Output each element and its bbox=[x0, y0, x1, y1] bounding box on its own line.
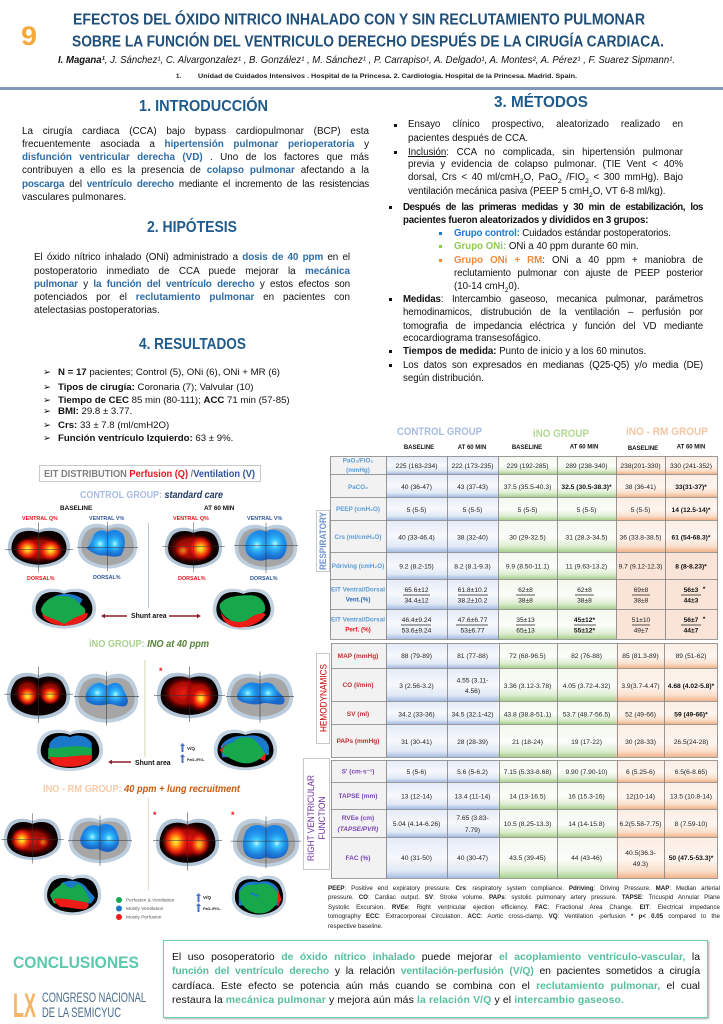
legend bbox=[116, 897, 175, 920]
text: metodos: ecocardiograma transesofágico. bbox=[403, 333, 541, 344]
row: RVEe bbox=[331, 809, 717, 837]
text: resultados list: Función ventrículo Izquierdo: 63 ± 9%. bbox=[58, 433, 233, 444]
text: hipotesis: postoperatorio inmediato de CCA puede mejorar la mecánica bbox=[34, 266, 350, 277]
iNO baseline merged map bbox=[37, 730, 103, 771]
column labels: control group: DORSAL% bbox=[250, 576, 278, 582]
text: resultados list: Crs: 33 ± 7.8 (ml/cmH2O) bbox=[58, 420, 169, 431]
text: resultados list: N = 17 pacientes; Control (5), ONi (6), ONi + MR (6) bbox=[58, 367, 280, 378]
RM baseline ventilation map bbox=[68, 816, 132, 866]
row: RVEe: 10.5 (8.25-13.3) bbox=[504, 821, 551, 828]
row: PAPs: 30 (28-33) bbox=[625, 739, 656, 746]
RM baseline perfusion map bbox=[1, 813, 64, 864]
heading: metodos: 3. MÉTODOS bbox=[494, 94, 588, 111]
row: TAPSE: 12(10-14) bbox=[626, 794, 655, 800]
iNO 60 min perfusion map bbox=[154, 667, 225, 722]
logo: LX congreso nacional: LX bbox=[13, 987, 36, 1024]
logo: LX congreso nacional bbox=[13, 987, 146, 1024]
row: PaO2/FiO2: (mmHg) bbox=[346, 467, 370, 474]
text: hipotesis: potenciados por el reclutamiento pulmonar en pacientes con bbox=[34, 292, 350, 303]
column labels: control group bbox=[22, 505, 282, 582]
authors: I. Magana¹, J. Sánchez¹, C. Alvargonzalez¹ , B. González¹ , M. Sánchez¹ , P. Carrapiso¹, A. Delgado¹, A. Montes², A. Pérez¹ , F. Suarez Sipmann¹. bbox=[58, 55, 675, 66]
legend: Mostly Perfusion bbox=[126, 914, 162, 920]
text: hipotesis bbox=[34, 252, 350, 316]
row: PEEP: 5 (5-5) bbox=[631, 507, 650, 514]
row: PaO2/FiO2 bbox=[330, 456, 717, 474]
row: S' bbox=[331, 760, 717, 782]
row: TAPSE: 14 (13-16.5) bbox=[509, 794, 546, 800]
up arrows V/Q PaO2: RM: PaO₂/FIO₂ bbox=[203, 907, 221, 911]
iNO baseline ventilation map bbox=[74, 672, 139, 726]
row: PAPs: 21 (18-24) bbox=[512, 739, 543, 746]
text: introduccion: disfunción ventricular derecha (VD) . Uno de los factores que más bbox=[22, 152, 369, 163]
row: EIT perfusion: 65±13 bbox=[516, 628, 535, 634]
panel: conclusiones text box bbox=[163, 940, 708, 1018]
row: FAC: FAC (%) bbox=[346, 855, 370, 862]
column labels: control group: VENTRAL V% bbox=[247, 516, 282, 522]
column headers: AT 60 MIN bbox=[570, 444, 598, 450]
column labels: control group: DORSAL% bbox=[93, 575, 121, 581]
row: EIT perfusion: Perf. (%) bbox=[345, 626, 371, 634]
text: metodos: Grupo ONi + RM: ONi a 40 ppm + maniobra de bbox=[454, 255, 703, 266]
row: PaCO2: 38 (36-41) bbox=[625, 484, 656, 491]
significance stars: * bbox=[231, 810, 235, 820]
text: resultados list: ➢ bbox=[43, 406, 51, 417]
column labels: control group: VENTRAL Q% bbox=[22, 516, 58, 522]
row: Crs: 40 (33-46.4) bbox=[398, 534, 435, 542]
control baseline ventilation map bbox=[77, 522, 138, 571]
text: metodos: Después de las primeras medidas y 30 min de estabilización, los bbox=[403, 202, 703, 213]
panel: results table bbox=[303, 426, 718, 879]
row: FAC: 43.5 (39-45) bbox=[509, 855, 546, 862]
row: EIT perfusion: 47.6±6.77 bbox=[458, 617, 488, 624]
legend: Mostly Ventilation bbox=[126, 906, 164, 912]
text: metodos: tomografia de impedancia eléctrica y función del VD mediante bbox=[403, 321, 703, 332]
row: EIT ventilation: 62±8 bbox=[518, 587, 533, 594]
text: hipotesis: pulmonar y la función del ventrículo derecho y estos efectos son bbox=[34, 279, 350, 290]
significance star: * bbox=[159, 666, 163, 676]
text: metodos: Los datos son expresados en medianas (Q25-Q5) y/o media (DE) bbox=[403, 360, 703, 371]
row: MAP: MAP (mmHg) bbox=[338, 653, 378, 660]
row: PEEP: PEEP (cmH₂O) bbox=[336, 506, 380, 513]
row: MAP: 81 (77-88) bbox=[457, 653, 488, 660]
row: FAC: 40 (30-47) bbox=[457, 855, 488, 862]
row: EIT ventilation: 62±8 bbox=[577, 587, 592, 594]
row: PaCO2 bbox=[330, 474, 717, 497]
heading: conclusiones: CONCLUSIONES bbox=[13, 954, 139, 972]
row: Crs: 38 (32-40) bbox=[457, 534, 488, 542]
row: MAP: 89 (51-62) bbox=[676, 653, 706, 660]
control baseline perfusion map bbox=[5, 522, 73, 572]
row: EIT ventilation: 38±8 bbox=[518, 598, 533, 604]
row: S': 6.5(6-8.65) bbox=[675, 769, 707, 776]
row: SV: 43.8 (38.8-51.1) bbox=[504, 712, 551, 718]
section: hemodynamics rows bbox=[331, 643, 717, 757]
up arrows V/Q PaO2: iNO: PaO₂/FIO₂ bbox=[187, 758, 205, 762]
row: S': 5 (5-6) bbox=[407, 769, 426, 776]
shunt area label: control bbox=[101, 613, 201, 620]
text: metodos: Ensayo clínico prospectivo, aleatorizado realizado en bbox=[408, 119, 683, 130]
row: EIT ventilation bbox=[330, 579, 717, 609]
section label: respiratory: RESPIRATORY bbox=[318, 512, 328, 570]
row: CO: 4.56) bbox=[465, 688, 480, 695]
grid: hemodynamics bbox=[332, 644, 718, 758]
row: EIT ventilation: 61.8±10.2 bbox=[458, 587, 488, 594]
row: SV: 34.2 (33-36) bbox=[398, 712, 435, 718]
row: Pdriving: 9.2 (8.2-15) bbox=[399, 564, 434, 570]
row: SV: SV (ml) bbox=[347, 711, 369, 718]
text: resultados list: ➢ bbox=[43, 367, 51, 378]
row: PaCO2: 37.5 (35.5-40.3) bbox=[504, 484, 551, 491]
footnote: abbreviations: PEEP: Positive end expiratory pressure. Crs: respiratory system compliance. Pdriving: Driving Pressure. MAP: Median arterial bbox=[328, 885, 720, 892]
row: EIT perfusion: EIT Ventral/Dorsal bbox=[331, 616, 385, 624]
row: MAP bbox=[331, 643, 717, 668]
row: CO: 3.9(3.7-4.47) bbox=[621, 683, 660, 690]
up arrows V/Q PaO2: iNO bbox=[180, 743, 205, 763]
text: metodos: Tiempos de medida: Punto de inicio y a los 60 minutos. bbox=[403, 346, 646, 357]
row: PAPs: 28 (28-39) bbox=[457, 739, 488, 746]
row: EIT perfusion: 46.4±9.24 bbox=[402, 617, 432, 624]
section label: right ventricular function: RIGHT VENTRICULAR bbox=[306, 775, 316, 861]
row: PaCO2: 32.5 (30.5-38.3)* bbox=[561, 484, 612, 491]
text: resultados list: ➢ bbox=[43, 420, 51, 431]
significance stars: * bbox=[153, 810, 157, 820]
grid: respiratory bbox=[330, 456, 718, 640]
poster number: 9 bbox=[21, 21, 37, 51]
text: metodos: pacientes fueron aleatorizados y divididos en 3 grupos: bbox=[403, 215, 648, 226]
row: PaO2/FiO2: 225 (163-234) bbox=[395, 463, 438, 470]
section label: hemodynamics: HEMODYNAMICS bbox=[318, 664, 328, 732]
text: metodos bbox=[389, 119, 703, 384]
iNO-RM group title: INO - RM GROUP: 40 ppm + lung recruitment bbox=[43, 784, 241, 795]
section: respiratory rows bbox=[330, 456, 717, 639]
row: CO: CO (l/min) bbox=[342, 682, 374, 689]
row: PaO2/FiO2: 330 (241-352) bbox=[670, 463, 712, 470]
column headers: BASELINE bbox=[404, 445, 434, 451]
RM baseline merged map bbox=[44, 875, 101, 915]
panel: conclusiones text box: cardíaca. Este efecto se potencia aún más cuando se combina con el reclutamiento pulmonar, el cual bbox=[172, 981, 700, 992]
row: S': 6 (5.25-6) bbox=[626, 769, 655, 776]
row: Pdriving: 8 (8-8.23)* bbox=[675, 564, 707, 570]
footnote: abbreviations: tomography ECC: Extracorporeal Circulation. ACC: Aortic cross-clamp. VQ: Ventilation -perfusion * p< 0.05 compared to the bbox=[328, 913, 720, 920]
text: resultados list: Tipos de cirugía: Coronaria (7); Valvular (10) bbox=[58, 382, 253, 393]
iNO 60 min merged map bbox=[214, 730, 277, 770]
row: CO: 3.36 (3.12-3.78) bbox=[504, 683, 551, 690]
affiliations: 1. bbox=[176, 73, 181, 80]
row: RVEe: 5.04 (4.14-6.26) bbox=[393, 821, 440, 828]
row: RVEe: 6.2(5.58-7.75) bbox=[619, 821, 662, 828]
text: resultados list: Tiempo de CEC 85 min (80-111); ACC 71 min (57-85) bbox=[58, 395, 290, 406]
row: Pdriving: Pdriving (cmH₂O) bbox=[332, 563, 384, 570]
row: PAPs: 19 (17-22) bbox=[571, 739, 602, 746]
control baseline merged map bbox=[32, 589, 96, 629]
row: RVEe: 14 (14-15.8) bbox=[568, 821, 605, 828]
row: PEEP bbox=[330, 497, 717, 520]
row: RVEe: (TAPSE/PVR) bbox=[338, 826, 378, 833]
RM 60 min ventilation map bbox=[231, 817, 301, 868]
row: CO bbox=[331, 668, 717, 701]
text: metodos: hemodinamicos, distrubución de la ventilación – perfusión por bbox=[403, 307, 703, 318]
row: CO: 4.68 (4.02-5.8)* bbox=[668, 683, 715, 690]
row: FAC: 50 (47.5-53.3)* bbox=[669, 855, 714, 862]
row: EIT perfusion: * bbox=[703, 616, 706, 623]
text: metodos: Medidas: Intercambio gaseoso, mecanica pulmonar, parámetros bbox=[403, 294, 703, 305]
heading: hipotesis: 2. HIPÓTESIS bbox=[147, 218, 237, 236]
row: PaCO2: 40 (36-47) bbox=[401, 484, 432, 491]
row: MAP: 82 (76-88) bbox=[571, 653, 602, 660]
title bbox=[72, 10, 664, 50]
column headers bbox=[404, 444, 705, 452]
grid: right ventricular bbox=[332, 760, 718, 878]
row: Crs bbox=[330, 520, 717, 552]
RM 60 min perfusion map bbox=[153, 812, 222, 870]
row: PaO2/FiO2: 222 (173-235) bbox=[451, 463, 494, 470]
row: EIT ventilation: EIT Ventral/Dorsal bbox=[331, 586, 385, 594]
logo: LX congreso nacional: DE LA SEMICYUC bbox=[42, 1004, 121, 1020]
header bbox=[0, 10, 723, 90]
panel: conclusiones text box: El uso posoperatorio de óxido nítrico inhalado puede mejorar el acoplamiento ventrículo-vascular, la bbox=[172, 952, 700, 963]
panel: conclusiones text box: restaura la mecánica pulmonar y mejora aún más la relación V/Q y el intercambio gaseoso. bbox=[172, 995, 624, 1006]
column headers: BASELINE bbox=[628, 446, 658, 452]
row: EIT perfusion: 55±12* bbox=[574, 628, 595, 634]
row: PaCO2: 43 (37-43) bbox=[457, 484, 488, 491]
row: SV: 59 (49-66)* bbox=[674, 712, 708, 718]
text: metodos: previa y evidencia de colapso pulmonar. (TIE Vent < 40% bbox=[408, 159, 683, 170]
row: EIT ventilation: 34.4±12 bbox=[404, 598, 429, 604]
row: PaO2/FiO2: 229 (192-285) bbox=[506, 463, 549, 470]
row: PEEP: 5 (5-5) bbox=[463, 507, 482, 514]
row: PaO2/FiO2: 289 (238-340) bbox=[565, 463, 608, 470]
column labels: control group: VENTRAL V% bbox=[89, 516, 124, 522]
text: hipotesis: El óxido nítrico inhalado (ONi) administrado a dosis de 40 ppm en el bbox=[34, 252, 350, 263]
text: introduccion: frecuentemente asociada a hipertensión pulmonar perioperatoria y bbox=[22, 139, 369, 150]
shunt area label: control: Shunt area bbox=[131, 613, 167, 620]
control 60 min merged map bbox=[213, 589, 274, 630]
row: TAPSE: 13 (12-14) bbox=[401, 794, 432, 800]
row: MAP: 88 (79-89) bbox=[401, 653, 432, 660]
EIT heading box bbox=[40, 466, 260, 482]
row: FAC bbox=[331, 837, 717, 878]
row: PAPs bbox=[331, 724, 717, 757]
row: EIT perfusion: 51±10 bbox=[632, 617, 651, 624]
row: PAPs: PAPs (mmHg) bbox=[337, 738, 379, 745]
iNO group title: iNO GROUP: INO at 40 ppm bbox=[89, 639, 209, 650]
section label: right ventricular function: FUNCTION bbox=[317, 796, 327, 840]
row: Crs: 36 (33.8-38.5) bbox=[619, 534, 662, 542]
text: metodos: reclutamiento pulmonar con ajuste de PEEP posterior bbox=[454, 268, 703, 279]
row: Pdriving: 9.9 (8.50-11.1) bbox=[506, 564, 549, 570]
row: PAPs: 31 (30-41) bbox=[401, 739, 432, 746]
shunt area label: iNO: Shunt area bbox=[135, 760, 171, 767]
text: introduccion: vasculares pulmonares. bbox=[22, 192, 126, 203]
up arrows V/Q PaO2: iNO: V/Q bbox=[187, 746, 195, 751]
row: PaCO2: 33(31-37)* bbox=[675, 484, 707, 491]
control group title: CONTROL GROUP: standard care bbox=[80, 490, 223, 501]
panel: conclusiones text box: función del ventrículo derecho y la relación ventilación-perfusión (V/Q) en pacientes sometidos a cirugía bbox=[172, 966, 700, 977]
section: right ventricular rows bbox=[331, 760, 717, 878]
row: EIT ventilation: 38.2±10.2 bbox=[458, 598, 488, 604]
row: CO: 4.05 (3.72-4.32) bbox=[563, 683, 610, 690]
footnote: abbreviations: respective baseline. bbox=[328, 923, 383, 930]
row: EIT ventilation: 69±8 bbox=[634, 587, 649, 594]
text: metodos: pacientes después de CCA. bbox=[408, 133, 528, 144]
column labels: control group: DORSAL% bbox=[178, 576, 206, 582]
text: resultados list: ➢ bbox=[43, 382, 51, 393]
row: EIT perfusion bbox=[330, 609, 717, 639]
row: Crs: Crs (ml/cmH₂O) bbox=[335, 534, 381, 541]
row: S': 7.15 (5.33-8.68) bbox=[504, 769, 551, 776]
row: Pdriving: 9.7 (9.12-12.3) bbox=[619, 564, 662, 570]
row: EIT perfusion: 45±12* bbox=[574, 617, 595, 624]
iNO baseline perfusion map bbox=[4, 667, 73, 723]
row: Crs: 31 (28.3-34.5) bbox=[565, 534, 608, 542]
column labels: control group: AT 60 MIN bbox=[204, 505, 235, 512]
row: RVEe: RVEe (cm) bbox=[342, 815, 374, 822]
title: SOBRE LA FUNCIÓN DEL VENTRICULO DERECHO DESPUÉS DE LA CIRUGÍA CARDIACA. bbox=[72, 32, 664, 50]
row: EIT ventilation: 65.6±12 bbox=[404, 587, 429, 594]
row: TAPSE: TAPSE (mm) bbox=[339, 793, 377, 800]
column labels: control group: BASELINE bbox=[60, 505, 93, 512]
text: introduccion: poscarga del ventrículo derecho mediante el incremento de las resistencias bbox=[22, 179, 369, 190]
row: SV: 52 (49-66) bbox=[625, 712, 656, 718]
column headers: AT 60 MIN bbox=[677, 444, 705, 450]
section label: right ventricular function bbox=[304, 758, 330, 870]
row: FAC: 40 (31-50) bbox=[401, 855, 432, 862]
panel: EIT distribution bbox=[1, 465, 302, 920]
row: EIT perfusion: 44±7 bbox=[684, 628, 699, 634]
logo: LX congreso nacional: CONGRESO NACIONAL bbox=[42, 989, 146, 1005]
row: PEEP: 14 (12.5-14)* bbox=[671, 507, 711, 514]
row: EIT ventilation: Vent.(%) bbox=[346, 596, 370, 604]
row: Pdriving: 8.2 (8.1-9.3) bbox=[454, 564, 491, 570]
significance stars bbox=[153, 810, 235, 820]
text: introduccion: La cirugía cardiaca (CCA) bajo bypass cardiopulmonar (BCP) esta bbox=[22, 126, 369, 137]
divider lines bbox=[145, 523, 148, 890]
text: introduccion bbox=[22, 126, 369, 203]
control 60 min ventilation map bbox=[234, 523, 298, 573]
row: TAPSE: 13.4 (11-14) bbox=[455, 794, 490, 800]
group headers: iNO - RM GROUP bbox=[626, 426, 708, 438]
row: CO: 3 (2.56-3.2) bbox=[399, 683, 434, 690]
text: metodos: Grupo control: Cuidados estándar postoperatorios. bbox=[454, 228, 671, 239]
row: SV: 34.5 (32.1-42) bbox=[451, 712, 494, 718]
row: Crs: 61 (54-68.3)* bbox=[671, 534, 711, 542]
title: EFECTOS DEL ÓXIDO NITRICO INHALADO CON Y SIN RECLUTAMIENTO PULMONAR bbox=[73, 10, 645, 28]
up arrows V/Q PaO2: RM bbox=[196, 893, 221, 912]
control 60 min perfusion map bbox=[162, 522, 225, 572]
row: PEEP: 5 (5-5) bbox=[577, 507, 596, 514]
group headers: iNO GROUP bbox=[533, 428, 589, 440]
row: EIT perfusion: 53±6.77 bbox=[460, 628, 485, 634]
text: resultados list: ➢ bbox=[43, 433, 51, 444]
text: resultados list bbox=[43, 367, 290, 444]
row: MAP: 85 (81.3-89) bbox=[622, 653, 659, 660]
text: metodos: (10-14 cmH20). bbox=[454, 281, 520, 294]
row: TAPSE bbox=[331, 782, 717, 809]
text: metodos: según distribución. bbox=[403, 373, 484, 384]
EIT heading box: EIT DISTRIBUTION Perfusion (Q) /Ventilation (V) bbox=[44, 469, 255, 480]
heading: resultados: 4. RESULTADOS bbox=[139, 336, 246, 353]
text: metodos: Grupo ONi: ONi a 40 ppm durante 60 min. bbox=[454, 241, 639, 252]
affiliations: Unidad de Cuidados Intensivos . Hospital de la Princesa. 2. Cardiología. Hospital de la Princesa. Madrid. Spain. bbox=[198, 73, 577, 80]
row: EIT ventilation: 44±3 bbox=[684, 598, 699, 604]
row: S': 9.90 (7.90-10) bbox=[565, 769, 608, 776]
footnote: abbreviations: Systolic Excursion. RVEe: Right ventricular ejection efficiency. FAC: Fractional Area Change. EIT: Electrical impedance bbox=[328, 904, 720, 911]
row: PaCO2: PaCO₂ bbox=[348, 484, 368, 491]
row: EIT ventilation: 38±8 bbox=[577, 598, 592, 604]
row: PaO2/FiO2: PaO₂/FiO₂ bbox=[343, 458, 373, 464]
shunt area label: iNO bbox=[108, 760, 171, 767]
row: Pdriving bbox=[330, 552, 717, 579]
row: TAPSE: 13.5 (10.8-14) bbox=[670, 794, 712, 800]
row: FAC: 49.3) bbox=[633, 861, 648, 868]
row: Pdriving: 11 (9.63-13.2) bbox=[566, 564, 607, 570]
text: metodos: ventilación mecánica pasiva (PEEP 5 cmH2O, VT 6-8 ml/kg). bbox=[408, 186, 665, 199]
text: introduccion: contribuyen a ello es la presencia de colapso pulmonar afectando a la bbox=[22, 165, 369, 176]
row: EIT ventilation: 56±3 bbox=[684, 587, 699, 594]
row: SV bbox=[331, 701, 717, 724]
footnote: abbreviations: pressure. CO: Cardiac output. SV: Stroke volume. PAPs: systolic pulmonary artery pressure. TAPSE: Tricuspid Annular Plane bbox=[328, 894, 720, 901]
row: EIT perfusion: 49±7 bbox=[634, 628, 649, 634]
row: EIT perfusion: 53.6±9.24 bbox=[402, 628, 432, 634]
row: S': 5.6 (5-6.2) bbox=[457, 769, 488, 776]
column labels: control group: VENTRAL Q% bbox=[173, 516, 209, 522]
text: metodos: Inclusión: CCA no complicada, sin hipertensión pulmonar bbox=[408, 147, 683, 158]
column headers: BASELINE bbox=[512, 445, 542, 451]
row: FAC: 44 (43-46) bbox=[571, 855, 602, 862]
column labels: control group: DORSAL% bbox=[27, 576, 55, 582]
row: PaO2/FiO2: 238(201-330) bbox=[620, 463, 661, 470]
row: S': S' (cm·s⁻¹) bbox=[342, 768, 374, 776]
row: RVEe: 7.79) bbox=[465, 827, 480, 834]
row: EIT perfusion: 56±7 bbox=[684, 617, 699, 624]
row: FAC: 40.5(36.3- bbox=[625, 850, 656, 857]
row: RVEe: 7.65 (3.83- bbox=[456, 815, 489, 822]
row: EIT perfusion: 35±13 bbox=[516, 617, 535, 624]
group headers bbox=[397, 426, 708, 440]
row: RVEe: 8 (7.59-10) bbox=[675, 821, 707, 828]
column headers: AT 60 MIN bbox=[458, 445, 486, 451]
row: SV: 53.7 (48.7-56.5) bbox=[563, 712, 610, 718]
row: PAPs: 26.5(24-28) bbox=[674, 739, 708, 746]
text: resultados list: BMI: 29.8 ± 3.77. bbox=[58, 406, 132, 417]
header rule bbox=[0, 87, 723, 90]
row: Crs: 30 (29-32.5) bbox=[509, 534, 546, 542]
text: metodos: dorsal, Crs < 40 ml/cmH2O, PaO2 /FIO2 < 300 mmHg). Bajo bbox=[408, 172, 683, 185]
up arrows V/Q PaO2: RM: V/Q bbox=[203, 895, 211, 900]
text: hipotesis: atelectasias postoperatorias. bbox=[34, 305, 160, 316]
section label: hemodynamics bbox=[316, 654, 330, 744]
heading: introduccion: 1. INTRODUCCIÓN bbox=[139, 97, 268, 115]
row: TAPSE: 16 (15.3-16) bbox=[568, 794, 605, 800]
row: EIT ventilation: * bbox=[703, 586, 706, 593]
row: PEEP: 5 (5-5) bbox=[518, 507, 537, 514]
row: EIT ventilation: 38±8 bbox=[634, 598, 649, 604]
text: resultados list: ➢ bbox=[43, 395, 51, 406]
row: PEEP: 5 (5-5) bbox=[407, 507, 426, 514]
iNO 60 min ventilation map bbox=[226, 672, 294, 723]
row: MAP: 72 (68-96.5) bbox=[509, 653, 546, 660]
RM 60 min merged map bbox=[232, 876, 286, 918]
legend: Perfusion & Ventilation bbox=[126, 898, 175, 904]
footnote: abbreviations bbox=[328, 885, 720, 930]
row: CO: 4.55 (3.11- bbox=[457, 678, 488, 684]
group headers: CONTROL GROUP bbox=[397, 426, 482, 438]
